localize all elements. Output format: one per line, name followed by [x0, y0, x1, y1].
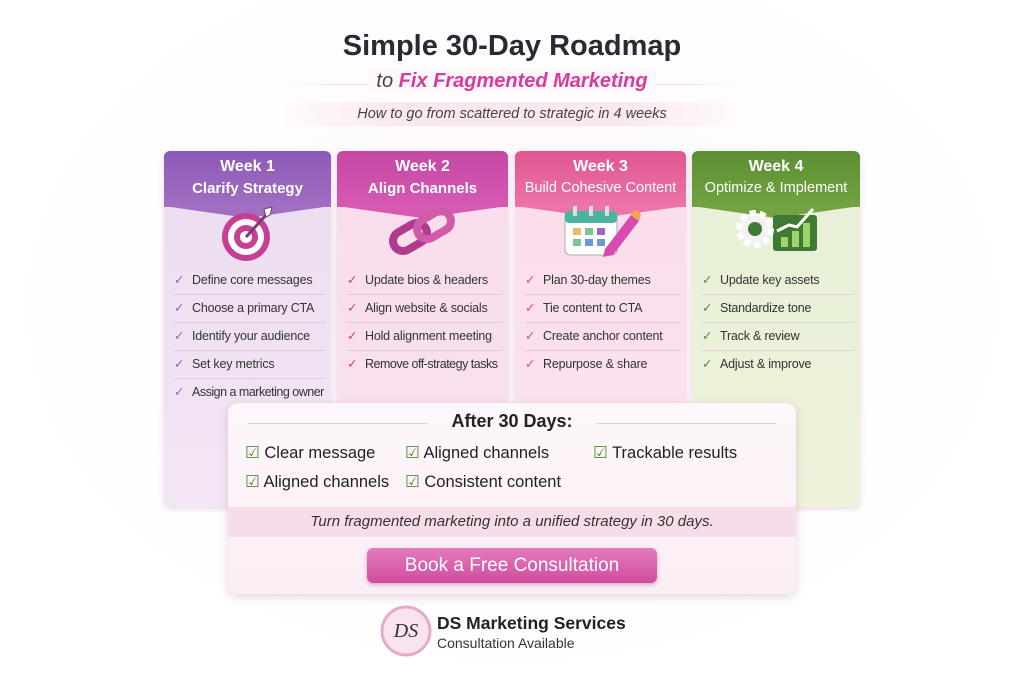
header: week 1	[164, 151, 331, 207]
tagline band	[228, 507, 796, 537]
list: week 2: ✓	[347, 273, 357, 287]
panel: week 2	[337, 151, 508, 507]
header: week 2: Align Channels	[368, 180, 477, 197]
list: week 1: Identify your audience	[192, 329, 310, 343]
list: week 3: ✓	[525, 273, 535, 287]
list: week 3: Repurpose & share	[543, 357, 647, 371]
header: week 2: Week 2	[395, 158, 450, 175]
list: week 1: Choose a primary CTA	[192, 301, 314, 315]
button: book consultation: Book a Free Consultation	[405, 555, 619, 576]
list: week 1: ✓	[174, 273, 184, 287]
results checklist: ☑ Aligned channels	[245, 473, 389, 491]
list: week 4: ✓	[702, 273, 712, 287]
subtitle line: to Fix Fragmented Marketing	[376, 70, 648, 92]
results checklist: ☑ Trackable results	[593, 444, 737, 462]
panel: week 4	[692, 151, 860, 507]
list: week 2: Update bios & headers	[365, 273, 488, 287]
list: week 3	[525, 273, 680, 371]
heading: after 30 days: After 30 Days:	[451, 411, 573, 431]
subtitle line	[270, 70, 754, 100]
list: week 2: Hold alignment meeting	[365, 329, 492, 343]
results checklist: ☑ Clear message	[245, 444, 375, 462]
tagline band: Turn fragmented marketing into a unified strategy in 30 days.	[310, 513, 714, 530]
list: week 2	[347, 273, 502, 371]
brand text: DS Marketing Services	[437, 613, 626, 633]
list: week 3: ✓	[525, 329, 535, 343]
logo: Consultation Available	[437, 635, 575, 651]
icon: logo circle	[380, 606, 432, 656]
list: week 1: Define core messages	[192, 273, 312, 287]
list: week 1: ✓	[174, 301, 184, 315]
list: week 4: ✓	[702, 357, 712, 371]
header: week 4	[692, 151, 860, 207]
list: week 2: ✓	[347, 329, 357, 343]
icon: chain link	[389, 207, 455, 255]
header: week 3: Week 3	[573, 158, 628, 175]
results checklist: ☑ Aligned channels	[405, 444, 549, 462]
list: week 1: ✓	[174, 357, 184, 371]
list: week 1: Assign a marketing owner	[192, 385, 324, 399]
list: week 4: Standardize tone	[720, 301, 811, 315]
list: week 2: ✓	[347, 301, 357, 315]
tagline: How to go from scattered to strategic in 4 weeks	[357, 106, 667, 122]
list: week 3: Create anchor content	[543, 329, 662, 343]
icon: gear and chart	[736, 208, 817, 251]
header: week 3: Build Cohesive Content	[525, 180, 676, 196]
icon: calendar and pencil	[564, 206, 641, 257]
icon: logo circle: DS	[393, 620, 418, 642]
panel: week 3	[515, 151, 686, 507]
list: week 1	[174, 273, 325, 399]
button: book consultation	[367, 548, 657, 583]
list: week 4: ✓	[702, 329, 712, 343]
list: week 3: Tie content to CTA	[543, 301, 642, 315]
list: week 1: Set key metrics	[192, 357, 274, 371]
header: week 4: Optimize & Implement	[705, 180, 847, 196]
list: week 4	[702, 273, 854, 371]
list: week 4: Update key assets	[720, 273, 819, 287]
header: week 1: Clarify Strategy	[192, 180, 303, 197]
list: week 3: Plan 30-day themes	[543, 273, 651, 287]
list: week 2: Align website & socials	[365, 301, 488, 315]
results checklist: ☑ Consistent content	[405, 473, 561, 491]
list: week 1: ✓	[174, 385, 184, 399]
list: week 3: ✓	[525, 357, 535, 371]
icon: target	[222, 206, 273, 261]
panel: week 1	[164, 151, 331, 507]
tagline	[280, 102, 744, 126]
list: week 1: ✓	[174, 329, 184, 343]
list: week 2: Remove off-strategy tasks	[365, 357, 497, 371]
list: week 4: Adjust & improve	[720, 357, 811, 371]
results checklist	[245, 444, 737, 491]
list: week 3: ✓	[525, 301, 535, 315]
header: week 4: Week 4	[749, 158, 803, 175]
list: week 2: ✓	[347, 357, 357, 371]
header: week 3	[515, 151, 686, 207]
logo	[380, 606, 626, 656]
list: week 4: ✓	[702, 301, 712, 315]
header: week 1: Week 1	[220, 158, 275, 175]
panel: after 30 days	[228, 403, 796, 594]
list: week 4: Track & review	[720, 329, 799, 343]
header: week 2	[337, 151, 508, 207]
title: Simple 30-Day Roadmap	[343, 30, 681, 62]
